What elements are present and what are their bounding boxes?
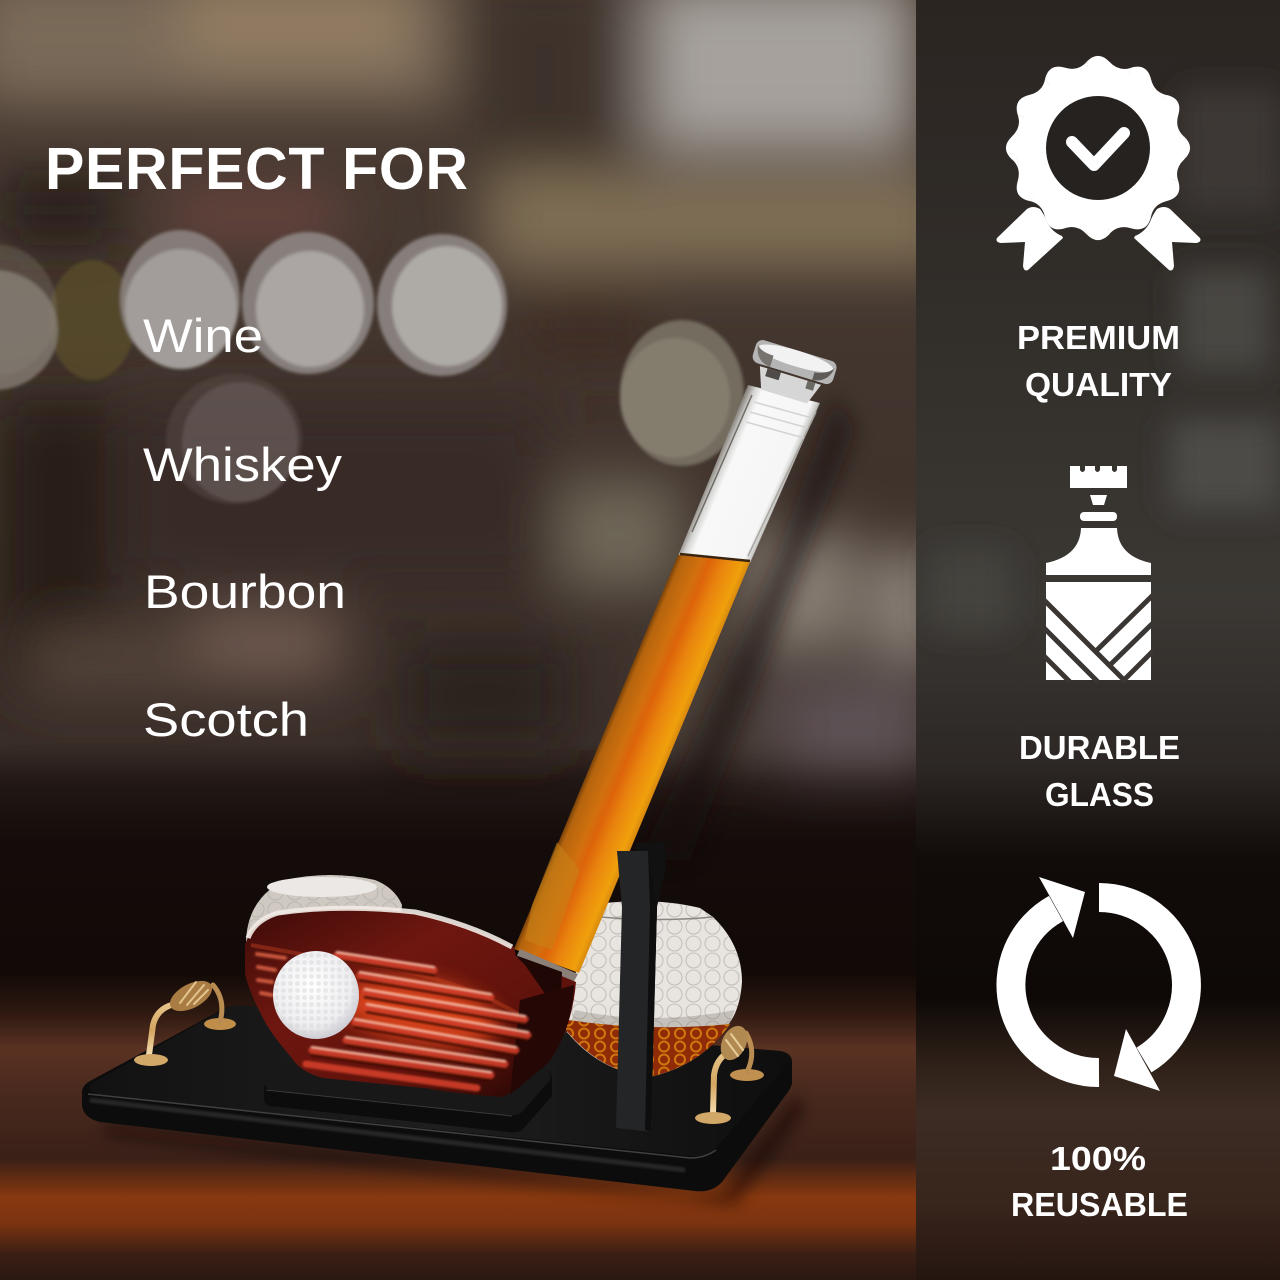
- label: 100% reusable: [1011, 1140, 1188, 1223]
- shot glass left: [246, 875, 402, 990]
- title: perfect for: PERFECT FOR: [45, 136, 468, 202]
- badge ribbon right: [1134, 207, 1200, 270]
- badge ribbon left: [996, 207, 1063, 270]
- tee stand: [616, 842, 666, 1132]
- golf ball: [273, 951, 359, 1039]
- label: durable glass: GLASS: [1045, 776, 1154, 813]
- recycle arc left: [1011, 908, 1099, 1073]
- gold handle right: [695, 1022, 764, 1124]
- background photo: [0, 0, 955, 1280]
- club head: [245, 908, 576, 1097]
- club ridges: [257, 952, 528, 1088]
- product: golf club decanter set: [82, 338, 855, 1205]
- shot glass right: [566, 901, 742, 1077]
- recycle arrowhead top: [1039, 877, 1085, 938]
- bottle shoulder: [1046, 528, 1151, 575]
- decanter stopper: [752, 340, 836, 404]
- base shadow: [100, 1095, 805, 1205]
- recycle arc right: [1099, 898, 1186, 1060]
- label: premium quality: QUALITY: [1025, 366, 1172, 403]
- badge centre disc: [1046, 96, 1150, 200]
- riser plate: [264, 1072, 552, 1132]
- badge rosette: [1002, 52, 1194, 244]
- badge check mark: [1072, 133, 1124, 165]
- bokeh lights: [0, 230, 744, 504]
- label: premium quality: [1017, 319, 1180, 403]
- tube shadow: [674, 400, 859, 796]
- wooden base plate: [82, 1006, 792, 1191]
- drink: scotch: Scotch: [143, 693, 309, 746]
- decanter tube: [514, 385, 820, 985]
- label: premium quality: PREMIUM: [1017, 319, 1180, 356]
- bottle collar: [1080, 512, 1117, 521]
- label: durable glass: DURABLE: [1019, 729, 1180, 766]
- list of drinks: [143, 309, 346, 746]
- label: 100% reusable: 100%: [1050, 1140, 1146, 1177]
- gold handle left: [134, 975, 236, 1066]
- icon: recycle arrows: [1011, 877, 1186, 1091]
- label: durable glass: [1019, 729, 1180, 813]
- bottle body with diagonal cuts: [1044, 582, 1153, 682]
- bottle crown stopper: [1070, 466, 1127, 488]
- drink: wine: Wine: [143, 309, 263, 362]
- drink: bourbon: Bourbon: [144, 565, 346, 618]
- right panel: [916, 0, 1280, 1280]
- drink: whiskey: Whiskey: [143, 438, 343, 491]
- club glow: [336, 967, 504, 1057]
- icon: bottle: [1044, 466, 1153, 682]
- label: 100% reusable: REUSABLE: [1011, 1186, 1188, 1223]
- bottle neck: [1090, 495, 1107, 505]
- recycle arrowhead bottom: [1114, 1029, 1160, 1091]
- icon: quality badge: [996, 52, 1200, 271]
